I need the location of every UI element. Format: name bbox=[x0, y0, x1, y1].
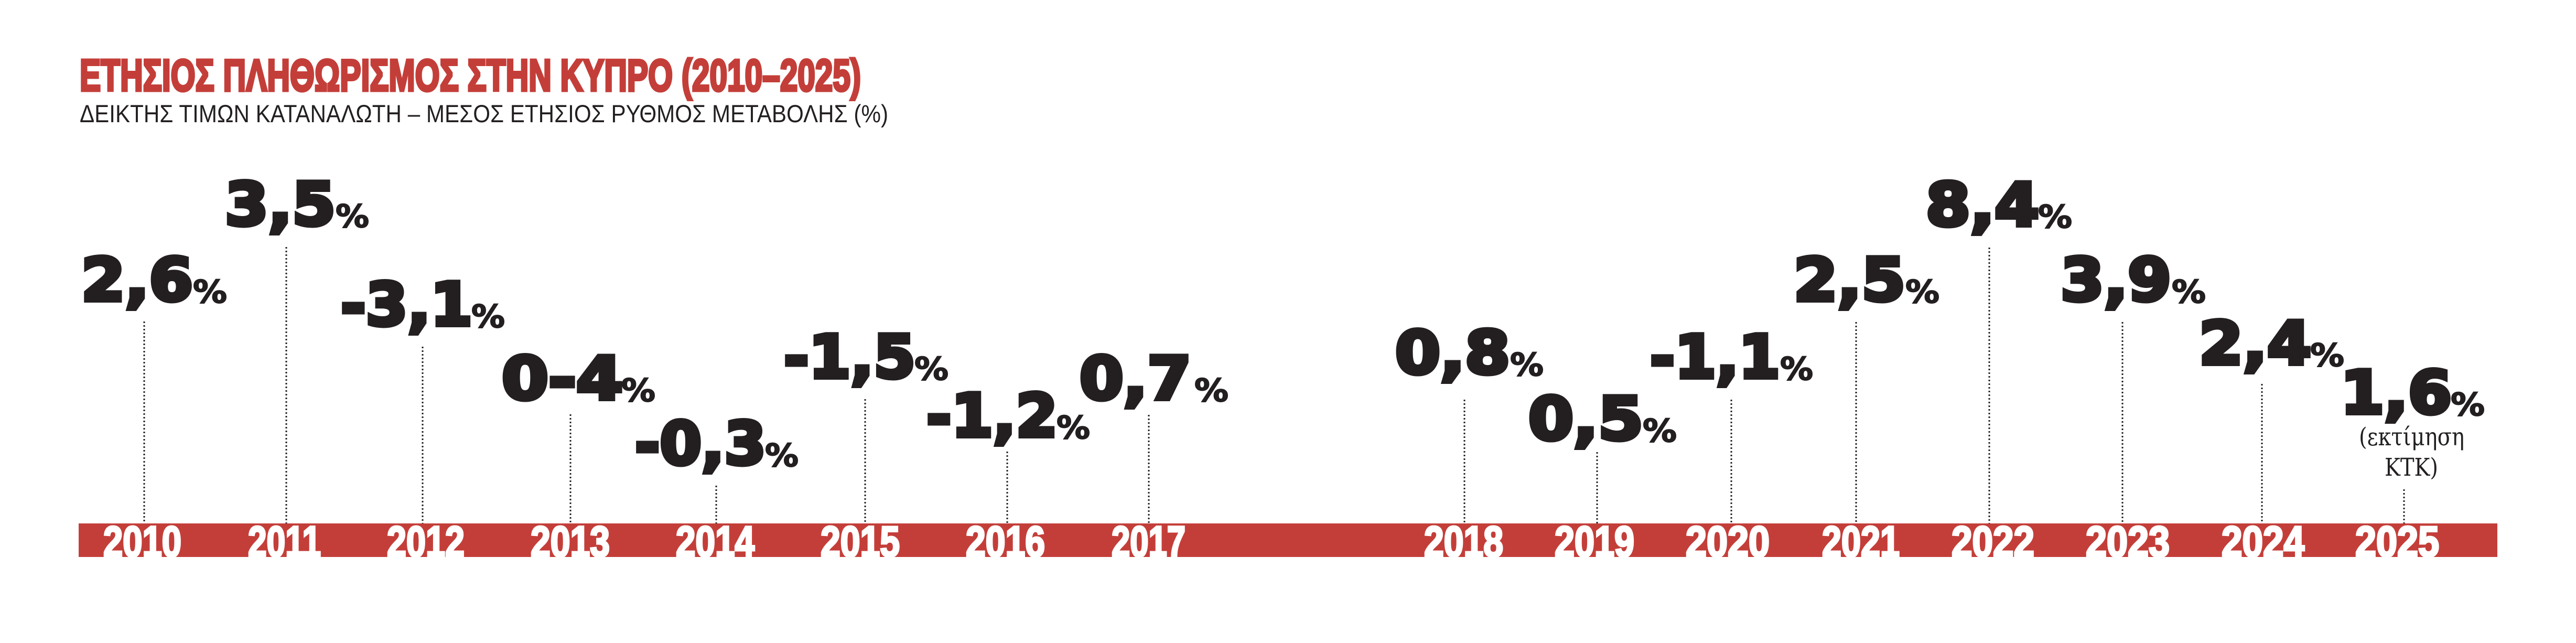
value 2014: % bbox=[765, 437, 799, 474]
value 2013: % bbox=[621, 372, 655, 409]
leader line 2011 bbox=[285, 247, 287, 523]
column 2014 bbox=[635, 409, 799, 566]
value 2015: % bbox=[914, 351, 949, 388]
year 2022: 2022 bbox=[1952, 517, 2034, 566]
year 2023: 2023 bbox=[2086, 517, 2170, 566]
title: ΕΤΗΣΙΟΣ ΠΛΗΘΩΡΙΣΜΟΣ ΣΤΗΝ ΚΥΠΡΟ (2010–2025) bbox=[80, 51, 861, 101]
estimate note: ΚΤΚ) bbox=[2385, 453, 2438, 482]
value 2025: 1,6 bbox=[2341, 358, 2452, 427]
leader line 2016 bbox=[1007, 452, 1008, 523]
column 2013 bbox=[502, 344, 655, 566]
leader line 2021 bbox=[1855, 322, 1857, 523]
column 2010 bbox=[81, 245, 227, 566]
year 2016: 2016 bbox=[966, 517, 1045, 566]
value 2023: 3,9 bbox=[2061, 245, 2171, 315]
column 2020 bbox=[1650, 323, 1813, 566]
year 2025: 2025 bbox=[2355, 517, 2439, 566]
year 2018: 2018 bbox=[1424, 517, 1503, 566]
value 2024: 2,4 bbox=[2199, 309, 2311, 378]
value 2022: % bbox=[2038, 199, 2072, 235]
value 2020: -1,1 bbox=[1650, 323, 1780, 392]
column 2025 bbox=[2341, 358, 2485, 566]
value 2019: 0,5 bbox=[1528, 384, 1643, 454]
value 2017: % bbox=[1194, 372, 1228, 409]
value 2014: -0,3 bbox=[635, 409, 766, 478]
chart: yearly inflation timeline bbox=[79, 170, 2497, 566]
leader line 2014 bbox=[715, 486, 717, 523]
year 2020: 2020 bbox=[1686, 517, 1770, 566]
column 2023 bbox=[2061, 245, 2206, 566]
year 2012: 2012 bbox=[387, 517, 465, 566]
column 2012 bbox=[341, 270, 505, 566]
leader line 2020 bbox=[1730, 400, 1732, 523]
value 2011: 3,5 bbox=[225, 170, 336, 239]
value 2017: 0,7 bbox=[1080, 344, 1191, 413]
column 2017 bbox=[1080, 344, 1228, 566]
year 2021: 2021 bbox=[1822, 517, 1900, 566]
leader line 2019 bbox=[1596, 452, 1598, 523]
estimate note: (εκτίμηση bbox=[2359, 423, 2464, 452]
value 2018: % bbox=[1510, 347, 1544, 383]
value 2022: 8,4 bbox=[1926, 170, 2039, 240]
leader line 2017 bbox=[1148, 415, 1149, 523]
value 2011: % bbox=[336, 198, 369, 235]
value 2012: -3,1 bbox=[341, 270, 472, 339]
leader line 2015 bbox=[864, 399, 866, 523]
leader line 2023 bbox=[2121, 322, 2124, 523]
value 2015: -1,5 bbox=[784, 323, 915, 392]
column 2016 bbox=[926, 381, 1090, 566]
leader line 2010 bbox=[144, 322, 145, 523]
value 2010: 2,6 bbox=[81, 245, 193, 315]
year 2019: 2019 bbox=[1555, 517, 1634, 566]
timeline bar bbox=[79, 523, 2497, 557]
leader line 2018 bbox=[1464, 400, 1465, 523]
value 2025: % bbox=[2451, 387, 2485, 423]
value 2013 bbox=[502, 344, 655, 413]
leader line 2022 bbox=[1988, 248, 1990, 523]
value 2021: 2,5 bbox=[1794, 245, 1905, 315]
column 2011 bbox=[225, 170, 369, 566]
subtitle: ΔΕΙΚΤΗΣ ΤΙΜΩΝ ΚΑΤΑΝΑΛΩΤΗ – ΜΕΣΟΣ ΕΤΗΣΙΟΣ ΡΥΘΜΟΣ ΜΕΤΑΒΟΛΗΣ (%) bbox=[80, 100, 888, 127]
year 2024: 2024 bbox=[2222, 517, 2304, 566]
column 2015 bbox=[784, 323, 949, 566]
year 2013: 2013 bbox=[531, 517, 610, 566]
leader line 2024 bbox=[2261, 384, 2263, 523]
value 2013: 0-4 bbox=[502, 344, 623, 413]
value 2016: % bbox=[1057, 410, 1090, 446]
column 2018 bbox=[1395, 318, 1544, 566]
estimate note bbox=[2359, 423, 2464, 482]
column 2022 bbox=[1926, 170, 2072, 566]
year 2010: 2010 bbox=[103, 517, 181, 566]
column 2019 bbox=[1528, 384, 1677, 566]
value 2010: % bbox=[193, 274, 227, 310]
year 2017: 2017 bbox=[1112, 517, 1185, 566]
value 2020: % bbox=[1780, 351, 1813, 388]
year 2014: 2014 bbox=[676, 517, 755, 566]
leader line 2013 bbox=[569, 414, 572, 523]
value 2023: % bbox=[2172, 274, 2206, 310]
value 2016: -1,2 bbox=[926, 381, 1058, 451]
value 2019: % bbox=[1643, 413, 1677, 449]
value 2018: 0,8 bbox=[1395, 318, 1510, 388]
value 2021: % bbox=[1905, 274, 1939, 310]
leader line 2025 bbox=[2403, 489, 2405, 523]
leader line 2012 bbox=[422, 347, 424, 523]
column 2024 bbox=[2199, 309, 2344, 566]
value 2012: % bbox=[471, 298, 505, 335]
year 2015: 2015 bbox=[821, 517, 900, 566]
value 2024: % bbox=[2310, 337, 2344, 374]
column 2021 bbox=[1794, 245, 1939, 566]
year 2011: 2011 bbox=[248, 517, 321, 566]
